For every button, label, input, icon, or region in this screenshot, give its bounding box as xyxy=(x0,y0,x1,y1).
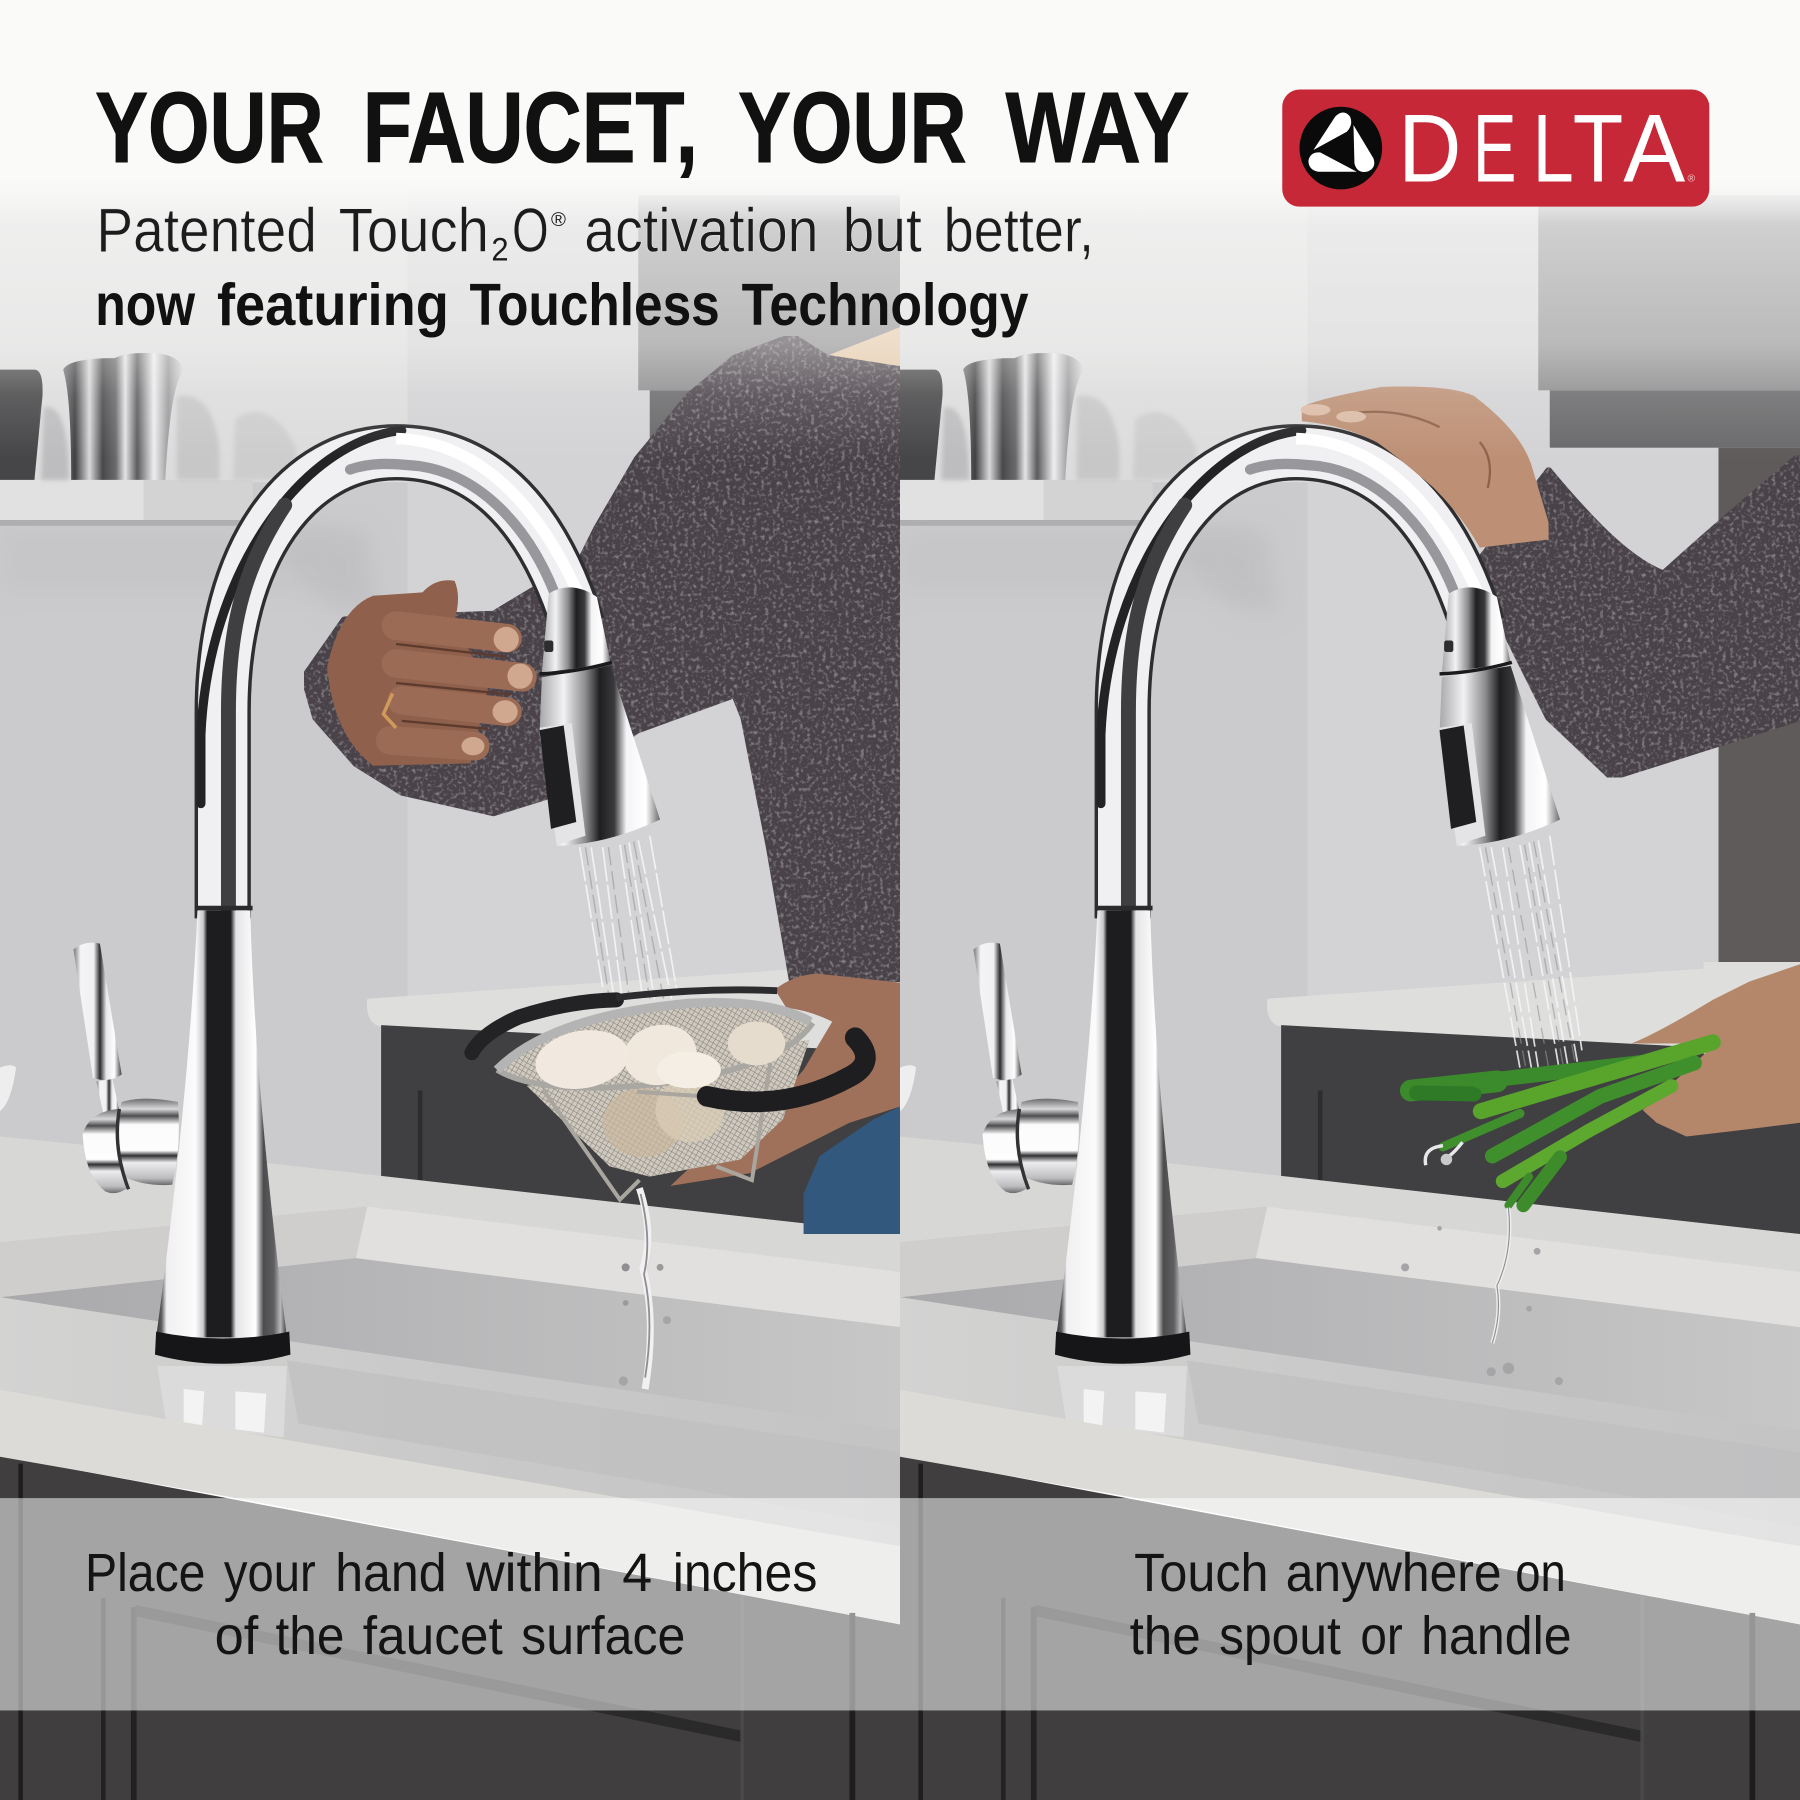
caption: left: faucet xyxy=(363,1606,503,1666)
logo wordmark: E xyxy=(1473,95,1516,202)
subtitle line 1: ® xyxy=(551,209,567,231)
title: FAUCET, xyxy=(363,73,698,184)
sweater xyxy=(304,336,900,982)
caption: left: surface xyxy=(521,1606,685,1666)
logo wordmark: L xyxy=(1533,95,1574,202)
hand on spout xyxy=(1301,386,1549,548)
title: YOUR xyxy=(95,73,324,184)
green onions xyxy=(1411,1042,1713,1205)
subtitle line 1: 2 xyxy=(491,232,509,268)
hand near spout xyxy=(327,580,533,766)
subtitle line 1: Patented xyxy=(96,196,317,265)
falling water and drops xyxy=(1401,1142,1563,1385)
caption: right: anywhere xyxy=(1286,1543,1502,1603)
hand under strainer xyxy=(670,973,900,1186)
logo wordmark xyxy=(1398,95,1686,202)
hand holding onions xyxy=(1631,964,1800,1136)
subtitle line 2: featuring xyxy=(217,271,449,338)
caption: left: the xyxy=(276,1606,344,1666)
logo wordmark: D xyxy=(1398,95,1461,202)
subtitle line 1: O xyxy=(512,196,549,265)
logo wordmark: T xyxy=(1573,95,1623,202)
logo wordmark: A xyxy=(1623,95,1686,202)
caption: left: hand xyxy=(335,1543,447,1603)
registered mark: ® xyxy=(1688,173,1696,184)
subtitle line 1: but xyxy=(843,196,922,265)
caption: left: Place xyxy=(85,1543,205,1603)
kitchen background and countertop xyxy=(0,195,900,1800)
panel: right scene, hand touching spout xyxy=(900,195,1800,1800)
title: YOUR xyxy=(738,73,967,184)
title xyxy=(95,73,1189,184)
caption: right: Touch xyxy=(1134,1543,1268,1603)
caption: right: handle xyxy=(1421,1606,1572,1666)
caption: left xyxy=(85,1543,817,1666)
white fade at top xyxy=(0,0,1800,459)
sweater sleeve xyxy=(1480,456,1800,777)
caption: left: within xyxy=(465,1543,603,1603)
water spray xyxy=(580,836,677,999)
panel: left scene, hand near faucet xyxy=(0,195,900,1800)
caption: right: spout xyxy=(1219,1606,1341,1666)
water spray xyxy=(1480,836,1582,1068)
caption: right: the xyxy=(1130,1606,1201,1666)
logo: Delta xyxy=(1282,90,1709,207)
caption: right xyxy=(1130,1543,1572,1666)
caption: right: or xyxy=(1360,1606,1403,1666)
caption: left: inches xyxy=(673,1543,817,1603)
kitchen background and countertop xyxy=(900,195,1800,1800)
water stream from strainer xyxy=(619,1188,671,1389)
subtitle line 1: activation xyxy=(584,196,818,265)
neck skin xyxy=(829,327,900,366)
subtitle line 2 xyxy=(95,271,1029,338)
caption: right: on xyxy=(1515,1543,1566,1603)
dark wall column xyxy=(1718,448,1800,964)
jeans xyxy=(804,1107,900,1234)
title: WAY xyxy=(1006,73,1189,184)
subtitle line 1: Touch xyxy=(339,196,489,265)
subtitle line 1 xyxy=(96,196,1094,268)
back counter right end xyxy=(1704,962,1800,1062)
subtitle line 2: Technology xyxy=(742,271,1029,338)
subtitle line 1: better, xyxy=(944,196,1094,265)
caption: left: 4 xyxy=(622,1543,652,1603)
caption: left: your xyxy=(224,1543,316,1603)
strainer with mushrooms xyxy=(472,990,865,1200)
faucet xyxy=(73,430,660,1364)
icon: delta emblem xyxy=(1299,107,1382,189)
subtitle line 2: Touchless xyxy=(470,271,720,338)
caption: left: of xyxy=(215,1606,259,1666)
faucet xyxy=(973,430,1560,1364)
subtitle line 2: now xyxy=(95,271,196,338)
